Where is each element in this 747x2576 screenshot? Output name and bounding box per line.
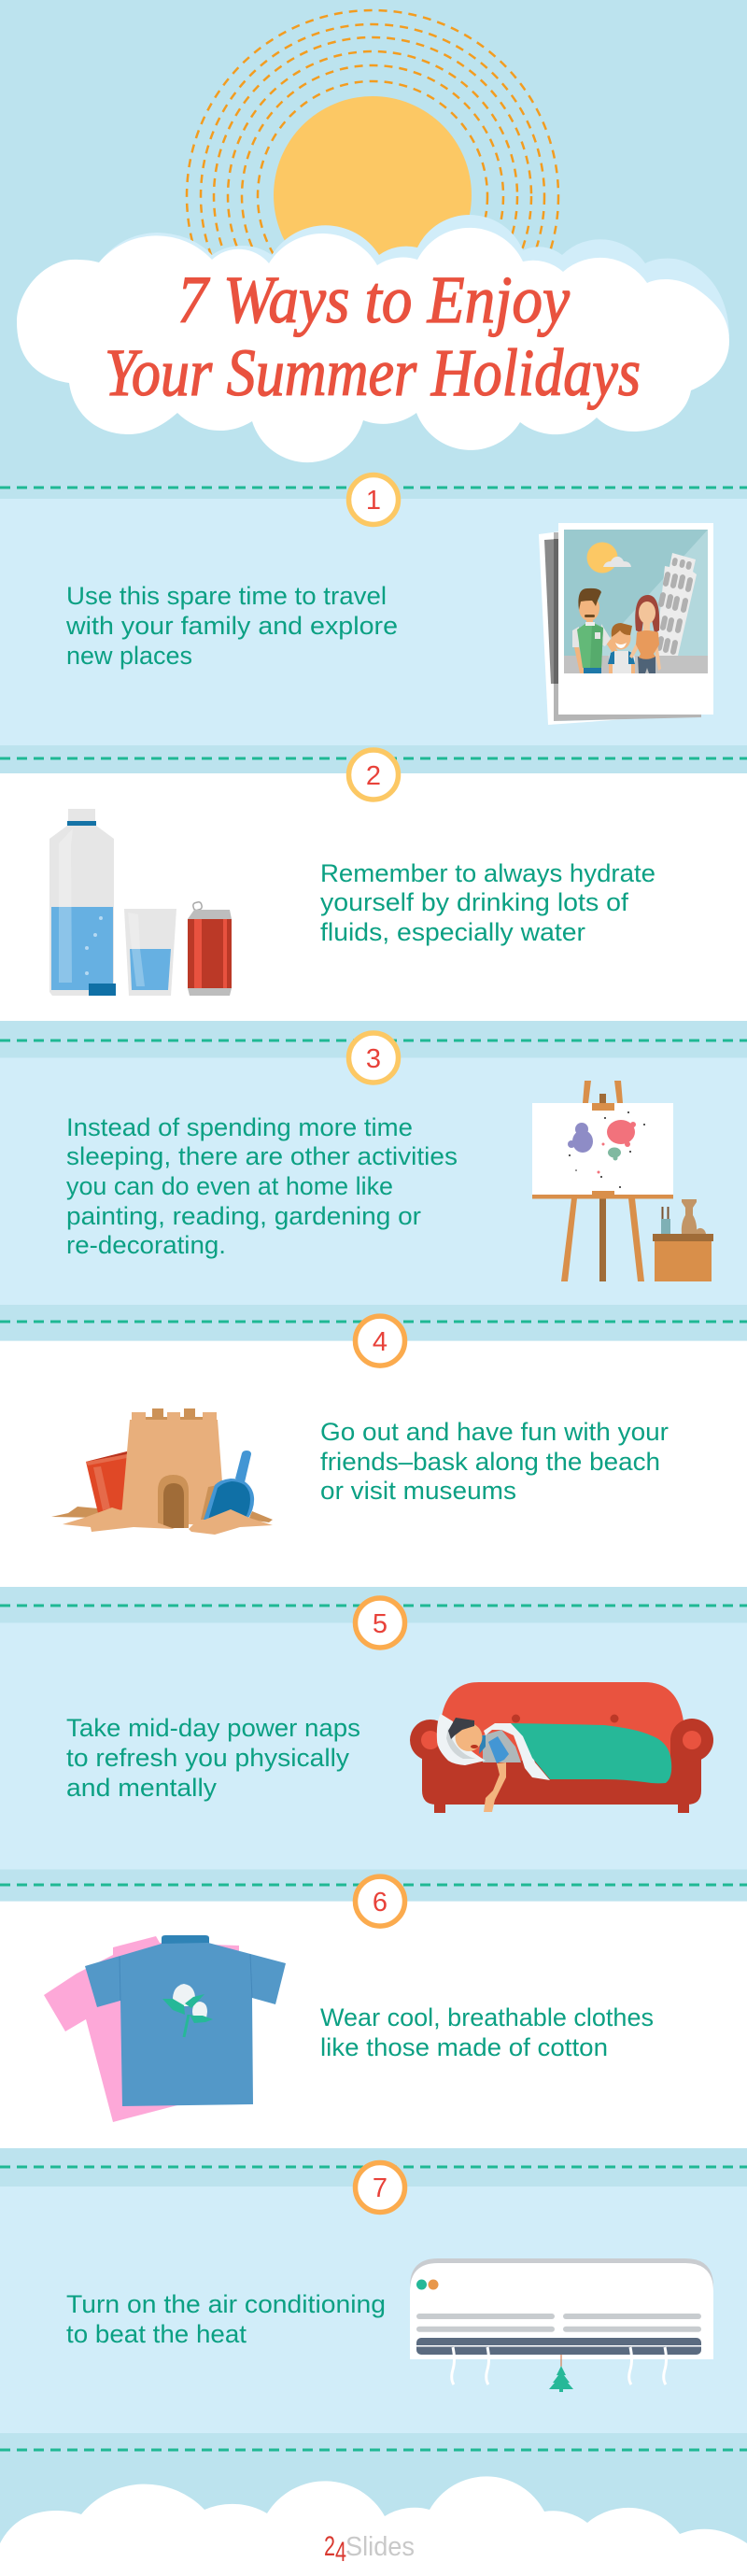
logo: 24Slides: 2	[324, 2531, 340, 2562]
text: air conditioning: Turn on the air conditioning	[66, 2290, 386, 2318]
title: 7 Ways to Enjoy	[177, 262, 570, 337]
paint splashes	[568, 1111, 645, 1188]
text: clothes: Wear cool, breathable clothes	[320, 2003, 654, 2031]
panel: step 5 nap	[0, 1598, 747, 1870]
icon: water bottle	[49, 809, 116, 996]
title: Your Summer Holidays	[105, 335, 641, 410]
badge 6: 6	[373, 1888, 388, 1918]
text: activities: re-decorating.	[66, 1231, 226, 1259]
logo: 24Slides	[324, 2531, 415, 2568]
badge 3	[349, 1033, 398, 1083]
text: activities	[66, 1113, 458, 1259]
panel: step 3 activities	[0, 1033, 747, 1305]
text: activities: you can do even at home like	[66, 1172, 393, 1200]
text: beach: Go out and have fun with your	[320, 1418, 669, 1446]
badge 7: 7	[373, 2173, 388, 2203]
text: clothes	[320, 2003, 654, 2061]
text: beach: or visit museums	[320, 1477, 516, 1505]
panel: step 2 hydrate	[0, 750, 747, 1021]
icon: soda can	[188, 901, 232, 996]
badge 1: 1	[366, 486, 381, 516]
text: beach	[320, 1418, 669, 1505]
woman	[629, 595, 661, 673]
text: hydrate	[320, 859, 655, 946]
icon: glass of water	[124, 909, 176, 996]
text: hydrate: yourself by drinking lots of	[320, 888, 629, 916]
badge 1	[349, 474, 398, 525]
man	[572, 588, 618, 673]
badge 2: 2	[366, 761, 381, 791]
logo: 24Slides: Slides	[345, 2532, 415, 2562]
text: activities: sleeping, there are other activities	[66, 1142, 458, 1170]
text: nap	[66, 1714, 360, 1802]
icon: sandcastle with bucket and scoop	[51, 1408, 273, 1535]
boy	[608, 623, 635, 673]
text: beach: friends–bask along the beach	[320, 1448, 660, 1476]
logo: 24Slides: 4	[335, 2537, 346, 2568]
text: activities: Instead of spending more time	[66, 1113, 413, 1141]
badge 5: 5	[373, 1609, 388, 1639]
text: travel	[65, 582, 398, 670]
icon: blue t-shirt with cotton	[85, 1935, 286, 2106]
icon: sleeping man on sofa	[410, 1682, 713, 1813]
panel: step 1 travel	[0, 474, 747, 745]
icon: pink t-shirt	[44, 1936, 239, 2122]
title cloud	[17, 228, 729, 462]
badge 3: 3	[366, 1044, 381, 1074]
text: nap: and mentally	[66, 1774, 218, 1802]
icon: easel with canvas	[532, 1081, 673, 1281]
text: hydrate: Remember to always hydrate	[320, 859, 655, 887]
icon: sun with dashed rays	[187, 10, 558, 382]
text: nap: to refresh you physically	[66, 1744, 350, 1772]
text: nap: Take mid-day power naps	[66, 1714, 360, 1742]
panel: step 7 air conditioning	[0, 2163, 747, 2433]
icon: side table with vase and brushes	[653, 1199, 713, 1281]
icon: air conditioner	[410, 2258, 713, 2392]
text: clothes: like those made of cotton	[320, 2033, 608, 2061]
badge 5	[355, 1598, 405, 1648]
text: activities: painting, reading, gardening or	[66, 1202, 421, 1230]
panel: step 4 beach	[0, 1316, 747, 1587]
icon: family photo	[539, 523, 713, 725]
badge 7	[355, 2163, 405, 2212]
badge 4	[355, 1316, 405, 1366]
back cloud	[99, 215, 729, 374]
panel: step 6 clothes	[0, 1876, 747, 2148]
text: travel: with your family and explore	[65, 612, 398, 640]
badge 4: 4	[373, 1327, 388, 1357]
footer cloud	[0, 2476, 747, 2576]
text: air conditioning	[66, 2290, 386, 2348]
text: air conditioning: to beat the heat	[66, 2320, 247, 2348]
badge 2	[349, 750, 398, 800]
title	[105, 262, 641, 410]
text: travel: new places	[66, 642, 192, 670]
text: hydrate: fluids, especially water	[320, 918, 585, 946]
badge 6	[355, 1876, 405, 1926]
text: travel: Use this spare time to travel	[66, 582, 387, 610]
